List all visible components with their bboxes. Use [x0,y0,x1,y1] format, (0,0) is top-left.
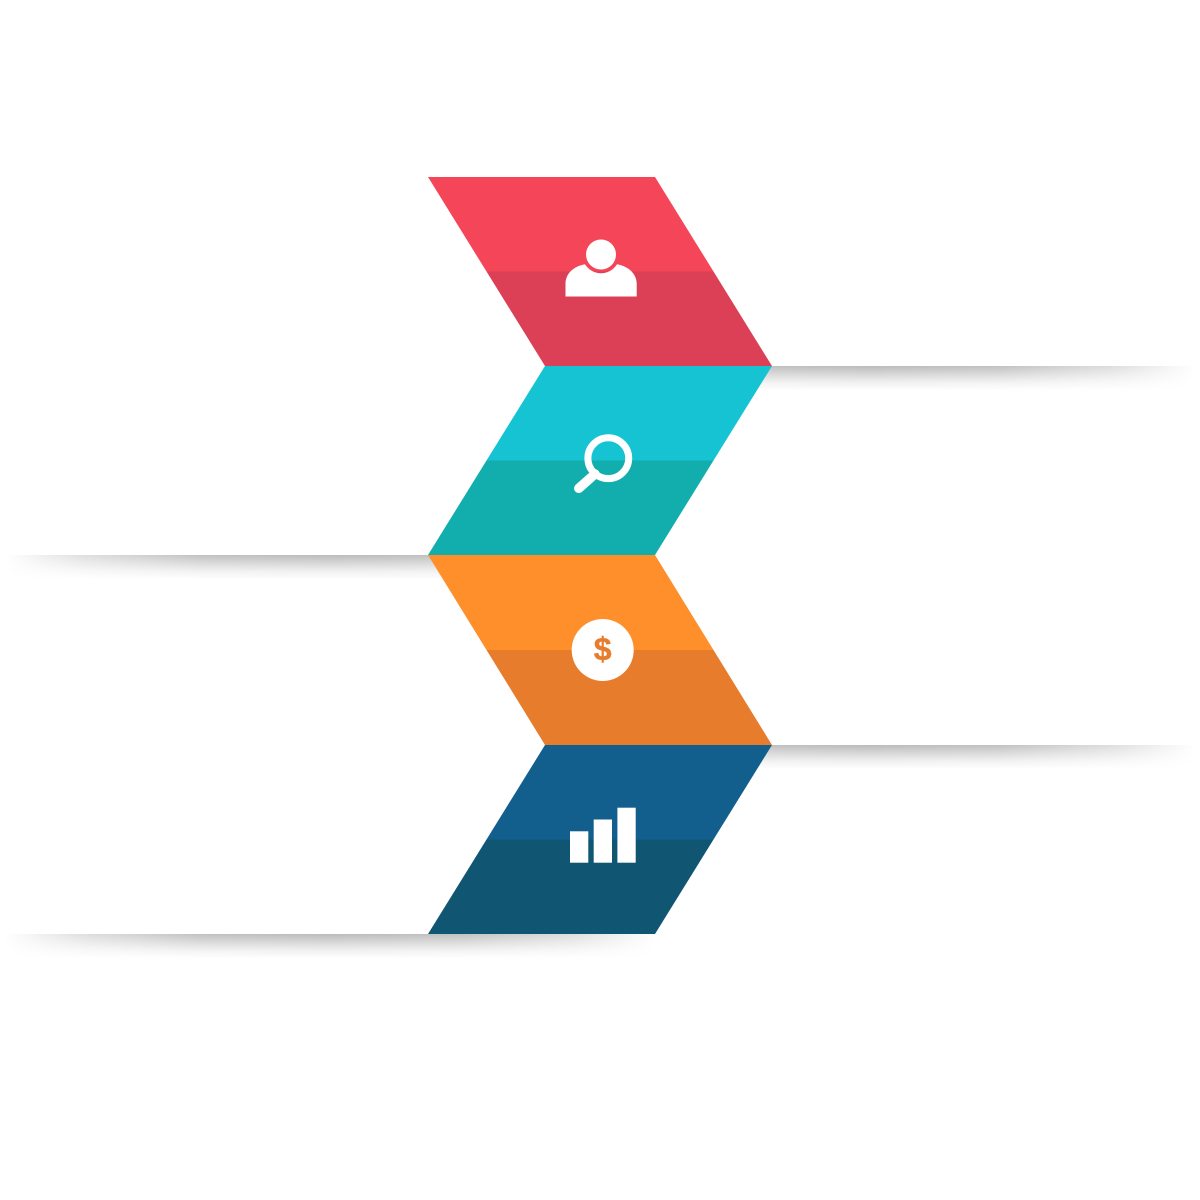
shadow: second chevron [26,555,440,574]
panel: red chevron segment [428,177,772,366]
panel: blue chevron segment [428,745,772,934]
panel: teal chevron segment [428,366,772,555]
shadow: fourth chevron [26,934,634,954]
panel: orange chevron segment [428,555,772,745]
icon: bar chart [570,808,636,863]
icon: magnifying glass [579,438,629,488]
icon: dollar coin: $ [594,631,612,667]
icon: dollar coin [572,619,634,681]
icon: person [566,240,637,296]
shadow: first chevron [760,366,1174,386]
shadow: third chevron [760,745,1174,764]
